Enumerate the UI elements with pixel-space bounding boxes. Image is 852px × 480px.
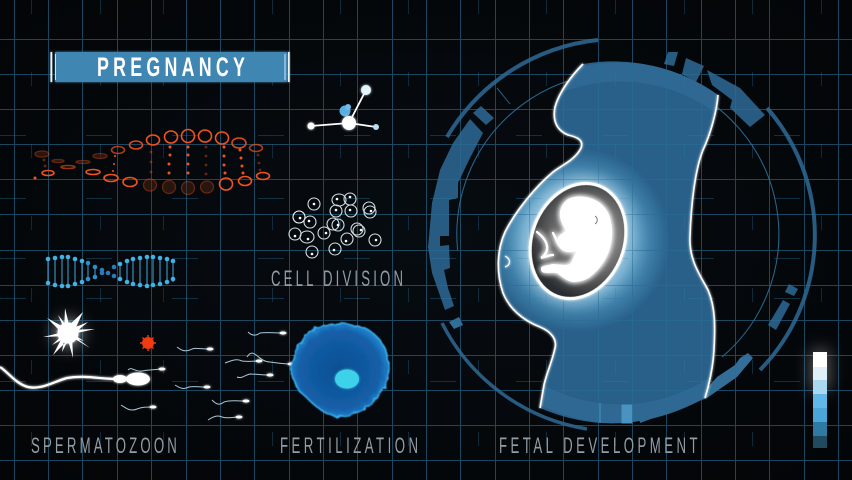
ring: inner thin circle bbox=[457, 73, 779, 357]
label: cell division: CELL DIVISION bbox=[271, 267, 403, 291]
icon: large spermatozoon bbox=[0, 367, 150, 388]
ring: left block bbox=[473, 106, 494, 125]
ring: lower left block bbox=[449, 317, 463, 329]
fetus eye bbox=[595, 216, 597, 224]
ring: left thick band bbox=[428, 119, 483, 310]
silhouette: body fill bbox=[499, 61, 718, 424]
label: fertilization: FERTILIZATION bbox=[280, 434, 418, 458]
ring: upper left arc bbox=[447, 40, 598, 137]
panel: fetal development ring bbox=[428, 40, 815, 429]
icon: fetus bbox=[537, 196, 612, 282]
ring: top right band bbox=[707, 70, 765, 127]
egg nucleus bbox=[335, 370, 359, 388]
icon: white starburst bbox=[43, 308, 95, 358]
ring: tick bbox=[497, 88, 510, 104]
icon: red virus bbox=[140, 335, 156, 351]
label: fetal development: FETAL DEVELOPMENT bbox=[499, 434, 698, 458]
icon: molecule bbox=[308, 85, 379, 130]
panel: womb with fetus bbox=[509, 163, 647, 317]
womb ellipse bbox=[514, 169, 642, 313]
icon: egg cell bbox=[290, 323, 389, 417]
icon: dividing cells bbox=[289, 193, 381, 258]
outline: back of body bbox=[690, 95, 718, 398]
title banner bbox=[50, 51, 290, 82]
chart: blue DNA strand bbox=[46, 255, 175, 288]
icons: small sperm swarm bbox=[121, 332, 294, 420]
ring: right blocks bbox=[768, 284, 798, 330]
gauge bar bbox=[811, 350, 829, 448]
outline: front of body bbox=[498, 64, 583, 408]
chart: orange helix bbox=[34, 130, 270, 194]
icon: navel mark bbox=[505, 256, 510, 267]
silhouette: body outline bbox=[498, 64, 718, 408]
ring: top right blocks bbox=[664, 52, 704, 82]
ring: lower left arc bbox=[442, 323, 587, 429]
ring: lower right stepped band bbox=[638, 353, 753, 423]
title text: PREGNANCY bbox=[97, 51, 245, 82]
label: spermatozoon: SPERMATOZOON bbox=[31, 434, 177, 458]
ring: right arc bbox=[760, 108, 815, 370]
